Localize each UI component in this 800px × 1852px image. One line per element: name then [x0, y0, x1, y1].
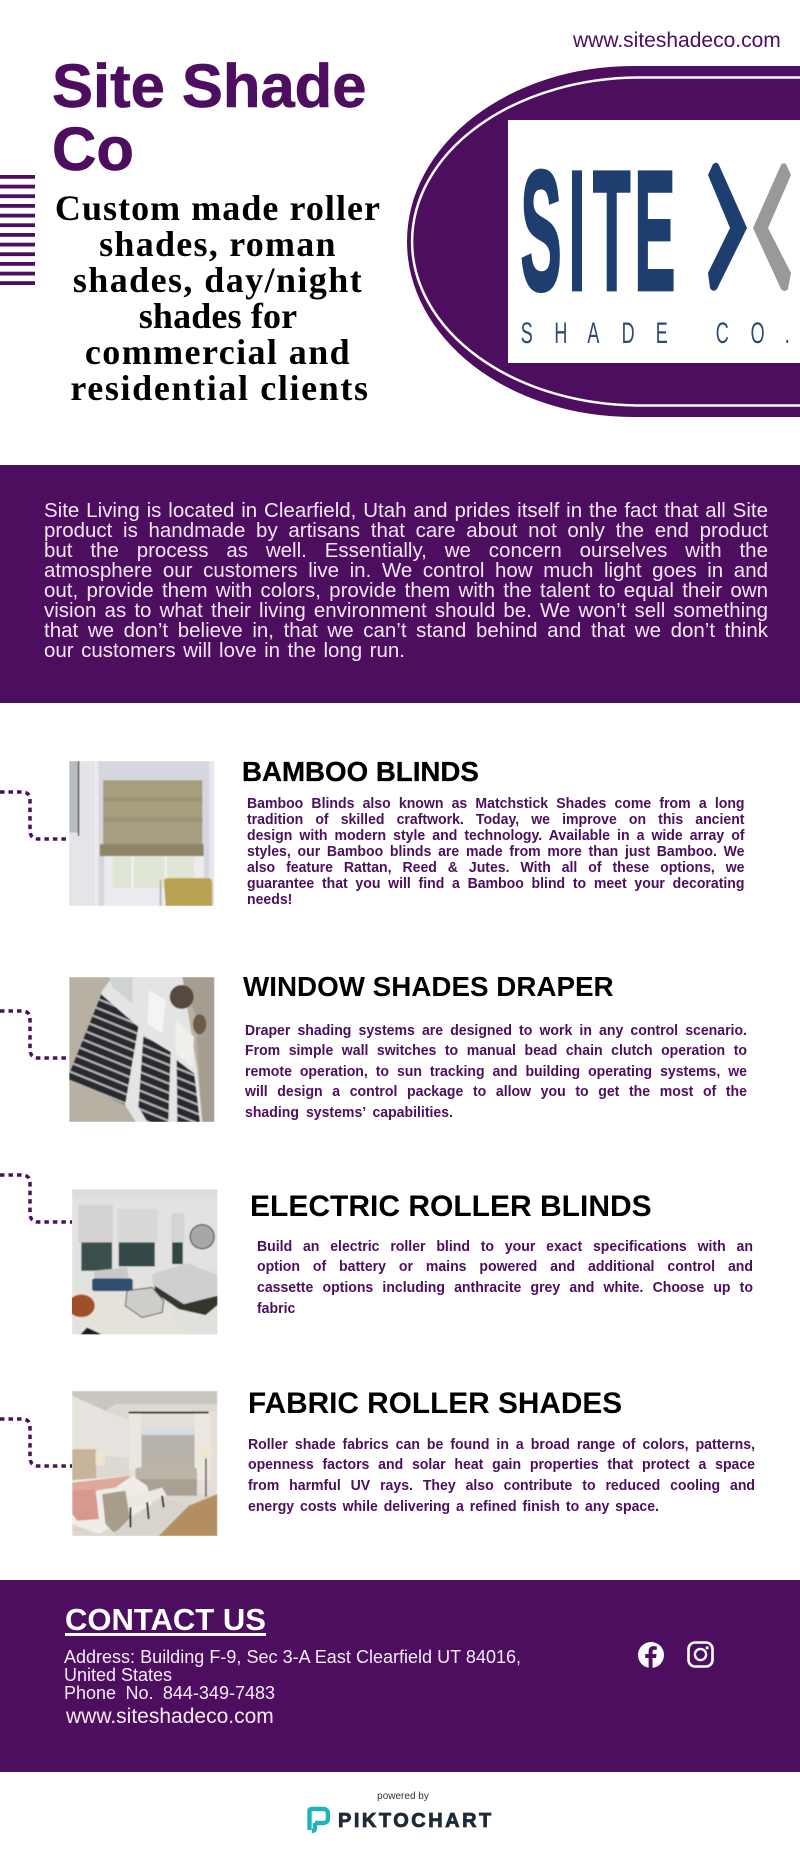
- subtitle: Custom made roller: [55, 188, 381, 228]
- contact website: www.siteshadeco.com: [66, 1705, 274, 1728]
- text: window shades draper: Draper shading systems are designed to work in any control scenario.: [245, 1023, 747, 1039]
- title: [52, 52, 366, 184]
- about text: that we don’t believe in, that we can’t stand behind and that we don’t think: [44, 619, 768, 642]
- text: electric roller blinds: fabric: [257, 1301, 295, 1317]
- text: bamboo blinds: guarantee that you will find a Bamboo blind to meet your decorating: [247, 876, 745, 892]
- icon: facebook: [638, 1642, 664, 1668]
- text: window shades draper: will design a control package to allow you to get the most of the: [245, 1084, 747, 1100]
- about text: Site Living is located in Clearfield, Utah and prides itself in the fact that all Site: [44, 499, 768, 522]
- heading: contact us: CONTACT US: [65, 1602, 266, 1637]
- about text: out, provide them with colors, provide them with the talent to equal their own: [44, 579, 768, 602]
- text: fabric roller shades: openness factors and solar heat gain properties that protect a space: [248, 1457, 755, 1473]
- text: bamboo blinds: Bamboo Blinds also known as Matchstick Shades come from a long: [247, 796, 745, 812]
- logo chevron blue: [708, 163, 747, 291]
- about text: product is handmade by artisans that care about not only the end product: [44, 519, 768, 542]
- about text: atmosphere our customers live in. We control how much light goes in and: [44, 559, 768, 582]
- icon: instagram: [687, 1641, 714, 1668]
- piktochart mark: [310, 1809, 328, 1831]
- title: Co: [52, 115, 134, 184]
- heading: window shades draper: WINDOW SHADES DRAPER: [243, 971, 614, 1002]
- text: window shades draper: [245, 1023, 747, 1121]
- logo chevron grey: [753, 163, 791, 291]
- dotted connector 2: [0, 1009, 70, 1060]
- logo card: [508, 120, 800, 363]
- photo: electric roller blinds: [72, 1189, 218, 1334]
- heading: bamboo blinds: BAMBOO BLINDS: [242, 756, 479, 787]
- powered by label: powered by: [377, 1791, 429, 1802]
- text: fabric roller shades: from harmful UV rays. They also contribute to reduced cooling and: [248, 1478, 755, 1494]
- about text: vision as to what their living environment should be. We won’t sell something: [44, 599, 768, 622]
- text: window shades draper: shading systems’ capabilities.: [245, 1105, 453, 1121]
- piktochart wordmark: PIKTOCHART: [338, 1810, 494, 1832]
- logo word SITE: SITE: [521, 137, 675, 327]
- text: bamboo blinds: design with modern style and technology. Available in a wide array of: [247, 828, 745, 844]
- dotted connector 3: [0, 1173, 72, 1224]
- piktochart logo: [307, 1806, 494, 1834]
- text: window shades draper: remote operation, to sun tracking and building operating systems, we: [245, 1064, 747, 1080]
- subtitle: commercial and: [85, 332, 351, 372]
- text: electric roller blinds: [257, 1239, 753, 1317]
- panel: contact: [0, 1580, 800, 1772]
- text: window shades draper: From simple wall switches to manual bead chain clutch operation to: [245, 1043, 747, 1059]
- about text: [44, 499, 768, 662]
- subtitle: [55, 188, 381, 408]
- subtitle: shades for: [139, 296, 297, 336]
- text: bamboo blinds: also feature Rattan, Reed & Jutes. With all of these options, we: [247, 860, 745, 876]
- dotted connector 1: [0, 790, 70, 841]
- text: bamboo blinds: styles, our Bamboo blinds are made from more than just Bamboo. We: [247, 844, 745, 860]
- about text: but the process as well. Essentially, we concern ourselves with the: [44, 539, 768, 562]
- contact address and phone: Phone No. 844-349-7483: [64, 1683, 275, 1703]
- pill background: [407, 66, 800, 417]
- heading: electric roller blinds: ELECTRIC ROLLER BLINDS: [250, 1190, 652, 1223]
- text: bamboo blinds: [247, 796, 745, 908]
- pill inner outline: [412, 78, 800, 406]
- logo pill panel: [407, 66, 800, 417]
- dotted connector 4: [0, 1417, 72, 1468]
- text: electric roller blinds: option of battery or mains powered and additional control and: [257, 1259, 753, 1275]
- subtitle: residential clients: [70, 368, 370, 408]
- panel: about: [0, 465, 800, 703]
- text: fabric roller shades: [248, 1437, 755, 1515]
- text: electric roller blinds: Build an electric roller blind to your exact specifications with an: [257, 1239, 753, 1255]
- text: fabric roller shades: energy costs while delivering a refined finish to any space.: [248, 1499, 659, 1515]
- decorative stripes block: [0, 175, 35, 285]
- about text: our customers will love in the long run.: [44, 639, 405, 662]
- photo: window shades draper: [69, 977, 214, 1122]
- text: fabric roller shades: Roller shade fabrics can be found in a broad range of colors, patterns,: [248, 1437, 755, 1453]
- subtitle: shades, day/night: [73, 260, 363, 300]
- contact address and phone: Address: Building F-9, Sec 3-A East Clearfield UT 84016,: [64, 1647, 521, 1667]
- text: bamboo blinds: needs!: [247, 892, 292, 908]
- logo words SHADE CO.: SHADECO.: [521, 318, 790, 350]
- website url top: www.siteshadeco.com: [573, 29, 781, 52]
- subtitle: shades, roman: [99, 224, 337, 264]
- heading: fabric roller shades: FABRIC ROLLER SHADES: [248, 1387, 622, 1420]
- title: Site Shade: [52, 52, 366, 121]
- photo: fabric roller shades: [72, 1391, 218, 1536]
- contact address and phone: [64, 1647, 521, 1703]
- photo: bamboo blind: [69, 761, 214, 906]
- text: electric roller blinds: cassette options including anthracite grey and white. Choose up to: [257, 1280, 753, 1296]
- text: bamboo blinds: tradition of skilled craftwork. Today, we improve on this ancient: [247, 812, 745, 828]
- contact address and phone: United States: [64, 1665, 172, 1685]
